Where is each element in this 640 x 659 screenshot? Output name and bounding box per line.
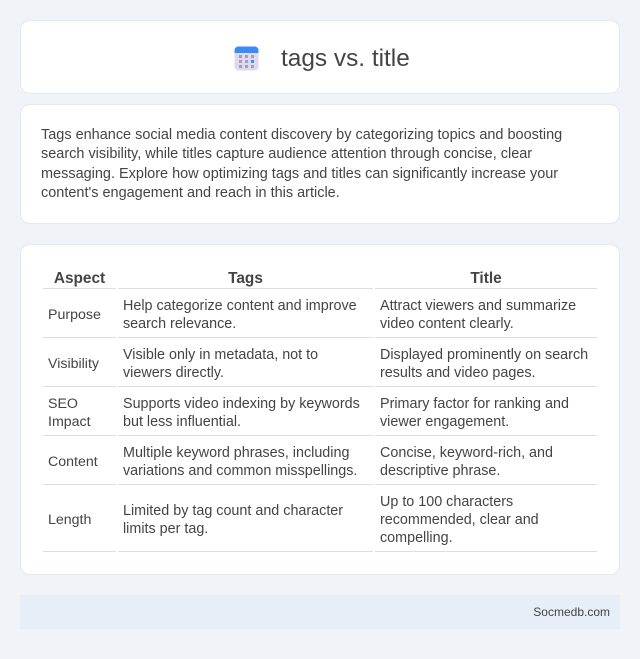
row: Length <box>43 494 597 552</box>
footer source text: Socmedb.com <box>533 605 610 619</box>
intro paragraph: messaging. Explore how optimizing tags and titles can significantly increase your <box>41 166 558 182</box>
intro paragraph: Tags enhance social media content discovery by categorizing topics and boosting <box>41 127 562 143</box>
row: Content: Concise, keyword-rich, and <box>380 445 553 461</box>
intro paragraph: content's engagement and reach in this article. <box>41 185 340 201</box>
row: Length: compelling. <box>380 530 453 546</box>
row: Length: Up to 100 characters <box>380 494 513 510</box>
row: SEO Impact: SEO <box>48 396 78 412</box>
row: Length: Limited by tag count and character <box>123 503 343 519</box>
icon: calendar <box>234 46 258 70</box>
row: Visibility: Visible only in metadata, not to <box>123 347 318 363</box>
row: Purpose: search relevance. <box>123 316 236 332</box>
row: Content: descriptive phrase. <box>380 463 500 479</box>
row: Purpose: Help categorize content and improve <box>123 298 357 314</box>
row: Content <box>43 445 597 485</box>
row: Visibility: Displayed prominently on search <box>380 347 588 363</box>
row: Visibility <box>43 347 597 387</box>
panel: intro text <box>20 104 620 224</box>
panel: comparison table <box>20 244 620 575</box>
row: Purpose <box>43 298 597 338</box>
row: SEO Impact: Primary factor for ranking and <box>380 396 569 412</box>
title: tags vs. title <box>281 45 410 72</box>
row: Visibility: viewers directly. <box>123 365 224 381</box>
row: Length: Length <box>48 512 91 528</box>
row: Length: limits per tag. <box>123 521 208 537</box>
row: Visibility: Visibility <box>48 356 99 372</box>
intro paragraph: search visibility, while titles capture audience attention through concise, clear <box>41 146 532 162</box>
row: SEO Impact: Impact <box>48 414 91 430</box>
table header row <box>43 270 597 289</box>
table <box>43 270 597 552</box>
row: Purpose: Attract viewers and summarize <box>380 298 576 314</box>
footer bar <box>20 595 620 629</box>
header panel <box>20 20 620 94</box>
row: Content: variations and common misspellings. <box>123 463 357 479</box>
table header row: Aspect <box>54 270 105 287</box>
row: Purpose: Purpose <box>48 307 101 323</box>
row: SEO Impact: but less influential. <box>123 414 241 430</box>
row: Length: recommended, clear and <box>380 512 539 528</box>
row: Visibility: results and video pages. <box>380 365 536 381</box>
row: Purpose: video content clearly. <box>380 316 514 332</box>
row: SEO Impact <box>43 396 597 436</box>
table header row: Tags <box>228 270 263 287</box>
row: Content: Content <box>48 454 98 470</box>
table header row: Title <box>470 270 502 287</box>
row: SEO Impact: Supports video indexing by keywords <box>123 396 360 412</box>
row: Content: Multiple keyword phrases, including <box>123 445 349 461</box>
intro paragraph <box>41 127 562 201</box>
row: SEO Impact: viewer engagement. <box>380 414 509 430</box>
